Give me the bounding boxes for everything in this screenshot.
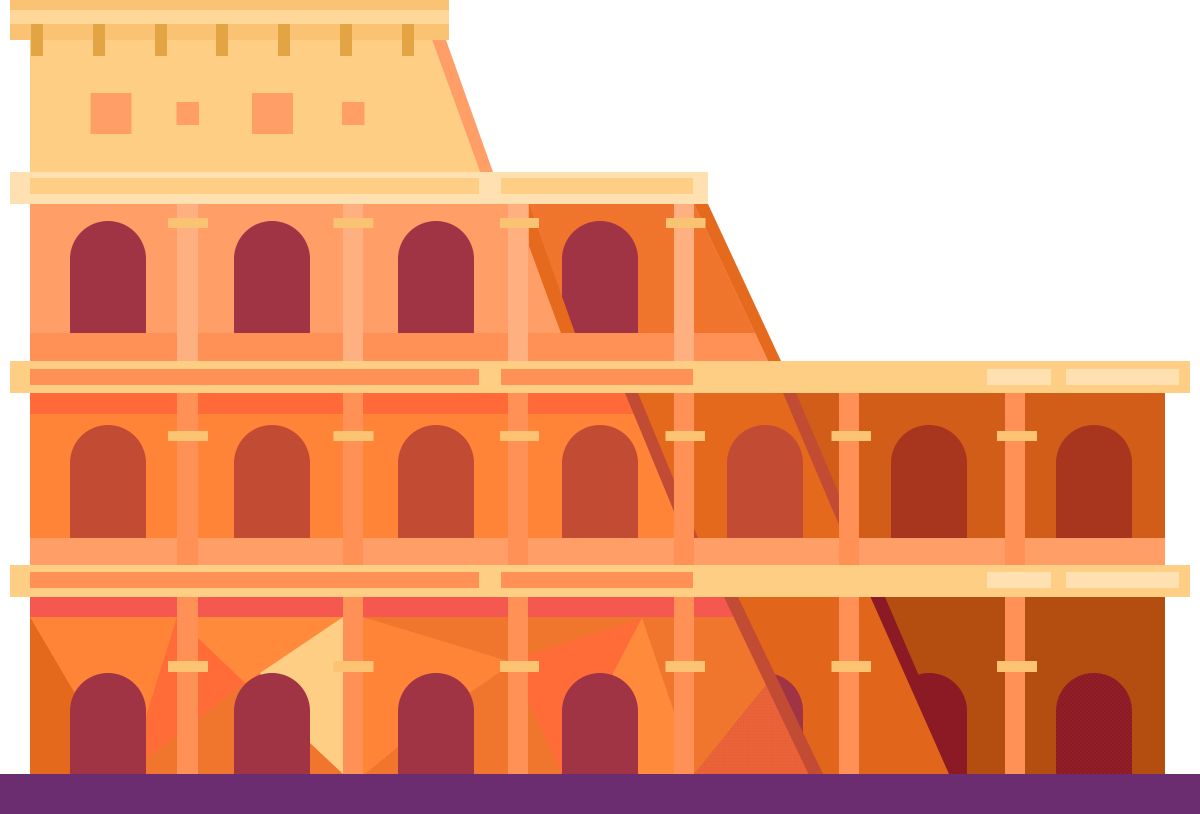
- middle arches light: [70, 425, 803, 538]
- bottom tier: [30, 597, 1165, 774]
- upper arches: [70, 221, 638, 333]
- middle crack stripes: [625, 393, 845, 538]
- red strip: [30, 597, 734, 617]
- crack stripe 3: [724, 597, 823, 774]
- upper tier: [30, 204, 781, 361]
- facet: orange middle: [363, 617, 508, 774]
- cornice brackets: [31, 24, 414, 56]
- middle cornice band: [10, 361, 1190, 393]
- facet: red-orange left: [147, 617, 245, 758]
- facet: textured right: [600, 618, 674, 774]
- upper columns: [177, 204, 694, 361]
- middle lit wall: [30, 414, 685, 538]
- top cornice: [10, 0, 449, 56]
- middle columns: [177, 393, 1025, 565]
- top attic wall: [30, 40, 493, 172]
- mid-tone wall over arch: [803, 597, 949, 774]
- bottom mid-tone wall: [724, 597, 949, 774]
- facet: large orange: [30, 617, 177, 736]
- right crack stripe: [694, 204, 781, 361]
- last arch: [1056, 673, 1132, 774]
- bottom left shadow: [30, 617, 100, 774]
- ground: [0, 774, 1200, 814]
- upper column caps: [168, 218, 706, 228]
- middle ledge: [30, 538, 1165, 565]
- upper ledge: [30, 333, 768, 361]
- bottom arches: [70, 673, 803, 774]
- middle column caps: [168, 431, 1037, 441]
- attic windows: [90, 93, 364, 134]
- wedge over arch foot: [871, 597, 949, 774]
- bottom column caps: [168, 661, 1037, 672]
- textured triangle: [694, 685, 809, 774]
- left crack stripe: [529, 204, 575, 333]
- facet: textured top: [198, 617, 343, 683]
- bottom base wall: [30, 617, 808, 774]
- bottom columns: [177, 597, 1025, 774]
- facet: red-orange right: [528, 618, 642, 774]
- lower cornice band: [10, 565, 1190, 597]
- middle mid-tone wall: [625, 393, 839, 538]
- arch in shadow: [891, 673, 967, 774]
- upper cornice band: [10, 172, 708, 204]
- middle red strip: [30, 393, 634, 414]
- crack stripe 4: [870, 597, 967, 774]
- middle tier: [30, 393, 1165, 565]
- light wedge over arch: [510, 204, 561, 333]
- facet: cream: [260, 617, 343, 774]
- middle arches dark: [891, 425, 1132, 538]
- wall left of crack: [694, 617, 766, 774]
